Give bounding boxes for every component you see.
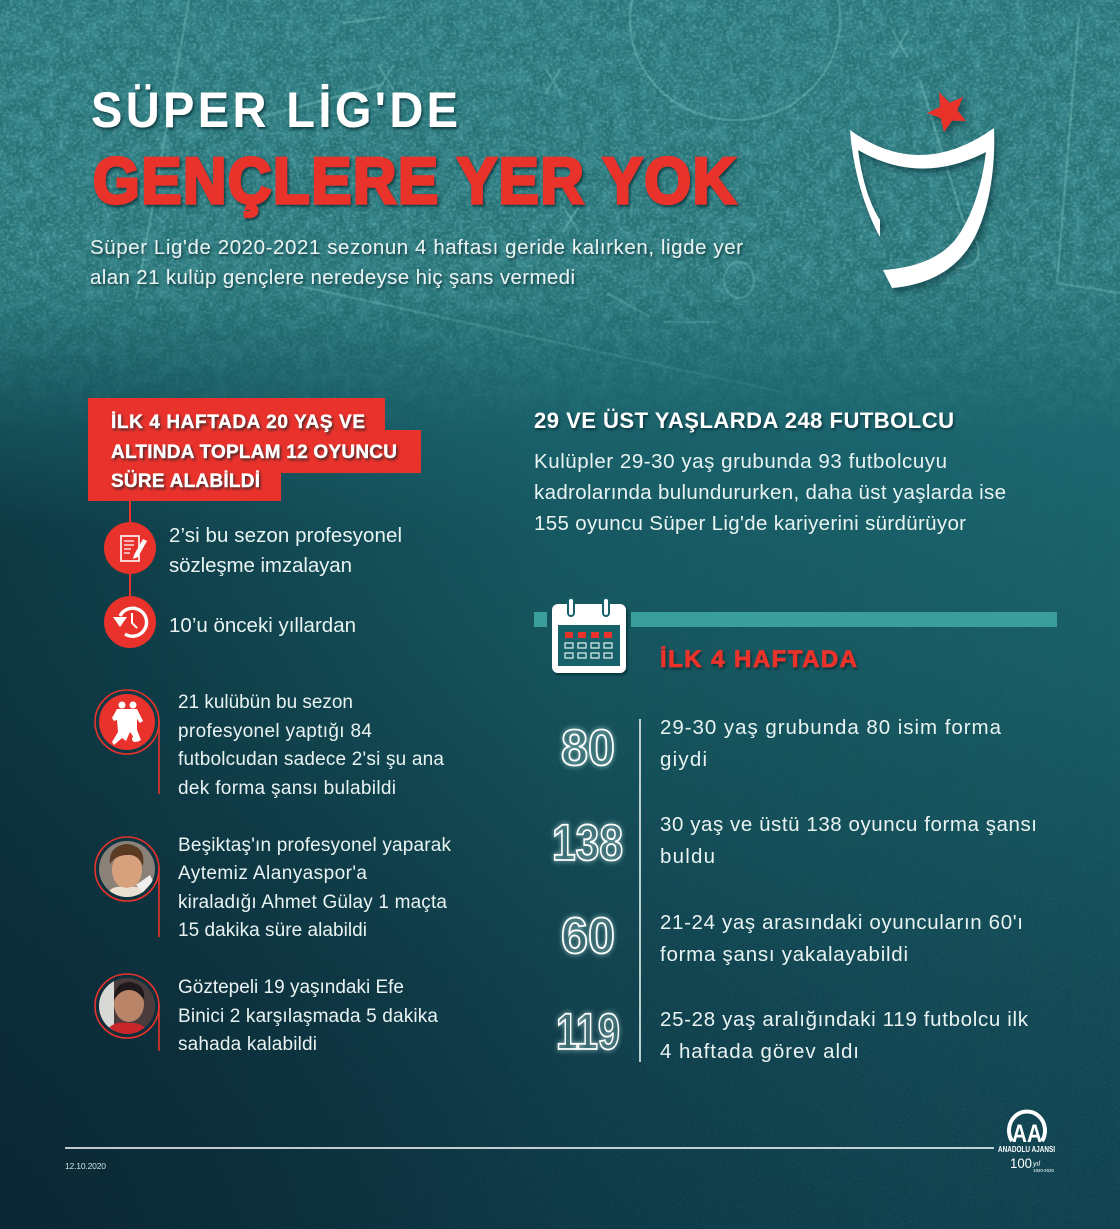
photo: Efe Binici	[95, 974, 159, 1051]
stat: 60: 60	[561, 907, 615, 964]
body text: Kulüpler 29-30 yaş grubunda 93 futbolcuyu	[534, 450, 947, 473]
panel: young players	[88, 398, 421, 648]
stat: 80: giydi	[660, 748, 707, 771]
stat: 80	[561, 716, 1002, 776]
fact: Ahmet Gülay	[95, 835, 452, 941]
logo: Anadolu Ajansı: ANADOLU AJANSI	[998, 1144, 1055, 1154]
stat: 138: 30 yaş ve üstü 138 oyuncu forma şansı	[660, 813, 1037, 836]
stat: 60: 21-24 yaş arasındaki oyuncuların 60'ı	[660, 911, 1023, 934]
panel: 29 and older	[534, 408, 1006, 535]
title line 2: GENÇLERE YER YOK	[93, 145, 736, 218]
icon: calendar	[552, 601, 626, 673]
fact: Efe Binici: Binici 2 karşılaşmada 5 dakika	[178, 1006, 438, 1027]
icon: footballers	[95, 690, 159, 794]
body text: kadrolarında bulundururken, daha üst yaşlarda ise	[534, 481, 1006, 504]
text: contract	[169, 524, 402, 577]
stat: 60	[561, 907, 1023, 966]
fact: Ahmet Gülay: kiraladığı Ahmet Gülay 1 maçta	[178, 892, 447, 913]
body text	[534, 450, 1006, 535]
panel: player facts	[95, 690, 452, 1055]
intro text: alan 21 kulüp gençlere neredeyse hiç şans vermedi	[90, 266, 575, 289]
icon: history clock	[104, 596, 156, 648]
title	[91, 83, 736, 218]
stat: 119: 119	[556, 1003, 620, 1060]
intro text	[90, 236, 743, 289]
red heading box: SÜRE ALABİLDİ	[111, 471, 260, 492]
fact: 84 professionals: 21 kulübün bu sezon	[178, 692, 353, 713]
footer rule	[65, 1147, 994, 1149]
logo: Anadolu Ajansı: yıl	[1032, 1161, 1040, 1168]
stat: 80: 80	[561, 719, 615, 776]
stat: 138	[552, 813, 1037, 871]
fact: Efe Binici: Göztepeli 19 yaşındaki Efe	[178, 977, 404, 998]
heading: 29 VE ÜST YAŞLARDA 248 FUTBOLCU	[534, 408, 954, 433]
logo: Anadolu Ajansı: 100	[1010, 1155, 1032, 1171]
panel: first 4 weeks	[534, 601, 1057, 1063]
fact: Ahmet Gülay: Aytemiz Alanyaspor'a	[178, 863, 367, 884]
icon: contract	[104, 522, 156, 574]
stat: 119: 25-28 yaş aralığındaki 119 futbolcu ilk	[660, 1008, 1029, 1031]
stat: 60: forma şansı yakalayabildi	[660, 943, 908, 966]
fact: 84 professionals	[95, 690, 444, 799]
logo: Anadolu Ajansı: 1920-2020	[1033, 1168, 1054, 1173]
logo: Anadolu Ajansı	[998, 1111, 1055, 1173]
fact: 84 professionals: futbolcudan sadece 2'si şu ana	[178, 749, 444, 770]
fact: Ahmet Gülay: Beşiktaş'ın profesyonel yaparak	[178, 835, 452, 856]
connector line	[129, 500, 131, 600]
text: previous years: 10’u önceki yıllardan	[169, 614, 356, 637]
text: contract: sözleşme imzalayan	[169, 554, 352, 577]
red heading box	[88, 398, 421, 501]
fact: Ahmet Gülay: 15 dakika süre alabildi	[178, 920, 367, 941]
fact: 84 professionals: profesyonel yaptığı 84	[178, 721, 372, 742]
heading: İLK 4 HAFTADA	[660, 646, 857, 673]
logo: Anadolu Ajansı: AA	[1012, 1119, 1042, 1147]
stat: 138: 138	[552, 814, 623, 871]
header band	[534, 612, 1057, 627]
stat: 138: buldu	[660, 845, 715, 868]
body text: 155 oyuncu Süper Lig'de kariyerini sürdürüyor	[534, 512, 966, 535]
stat: 119: 4 haftada görev aldı	[660, 1040, 859, 1063]
photo: Ahmet Gülay	[95, 837, 159, 937]
red heading box: ALTINDA TOPLAM 12 OYUNCU	[111, 442, 397, 463]
fact: Efe Binici: sahada kalabildi	[178, 1034, 317, 1055]
date: 12.10.2020	[65, 1161, 106, 1171]
stat: 119	[556, 1003, 1029, 1063]
divider line	[639, 719, 641, 1062]
icon: Süper Lig logo	[850, 92, 994, 288]
text: contract: 2’si bu sezon profesyonel	[169, 524, 402, 547]
intro text: Süper Lig'de 2020-2021 sezonun 4 haftası geride kalırken, ligde yer	[90, 236, 743, 259]
fact: Efe Binici	[95, 974, 438, 1055]
red heading box: İLK 4 HAFTADA 20 YAŞ VE	[111, 412, 365, 433]
stat: 80: 29-30 yaş grubunda 80 isim forma	[660, 716, 1002, 739]
title line 1: SÜPER LİG'DE	[91, 83, 458, 138]
fact: 84 professionals: dek forma şansı bulabildi	[178, 778, 396, 799]
